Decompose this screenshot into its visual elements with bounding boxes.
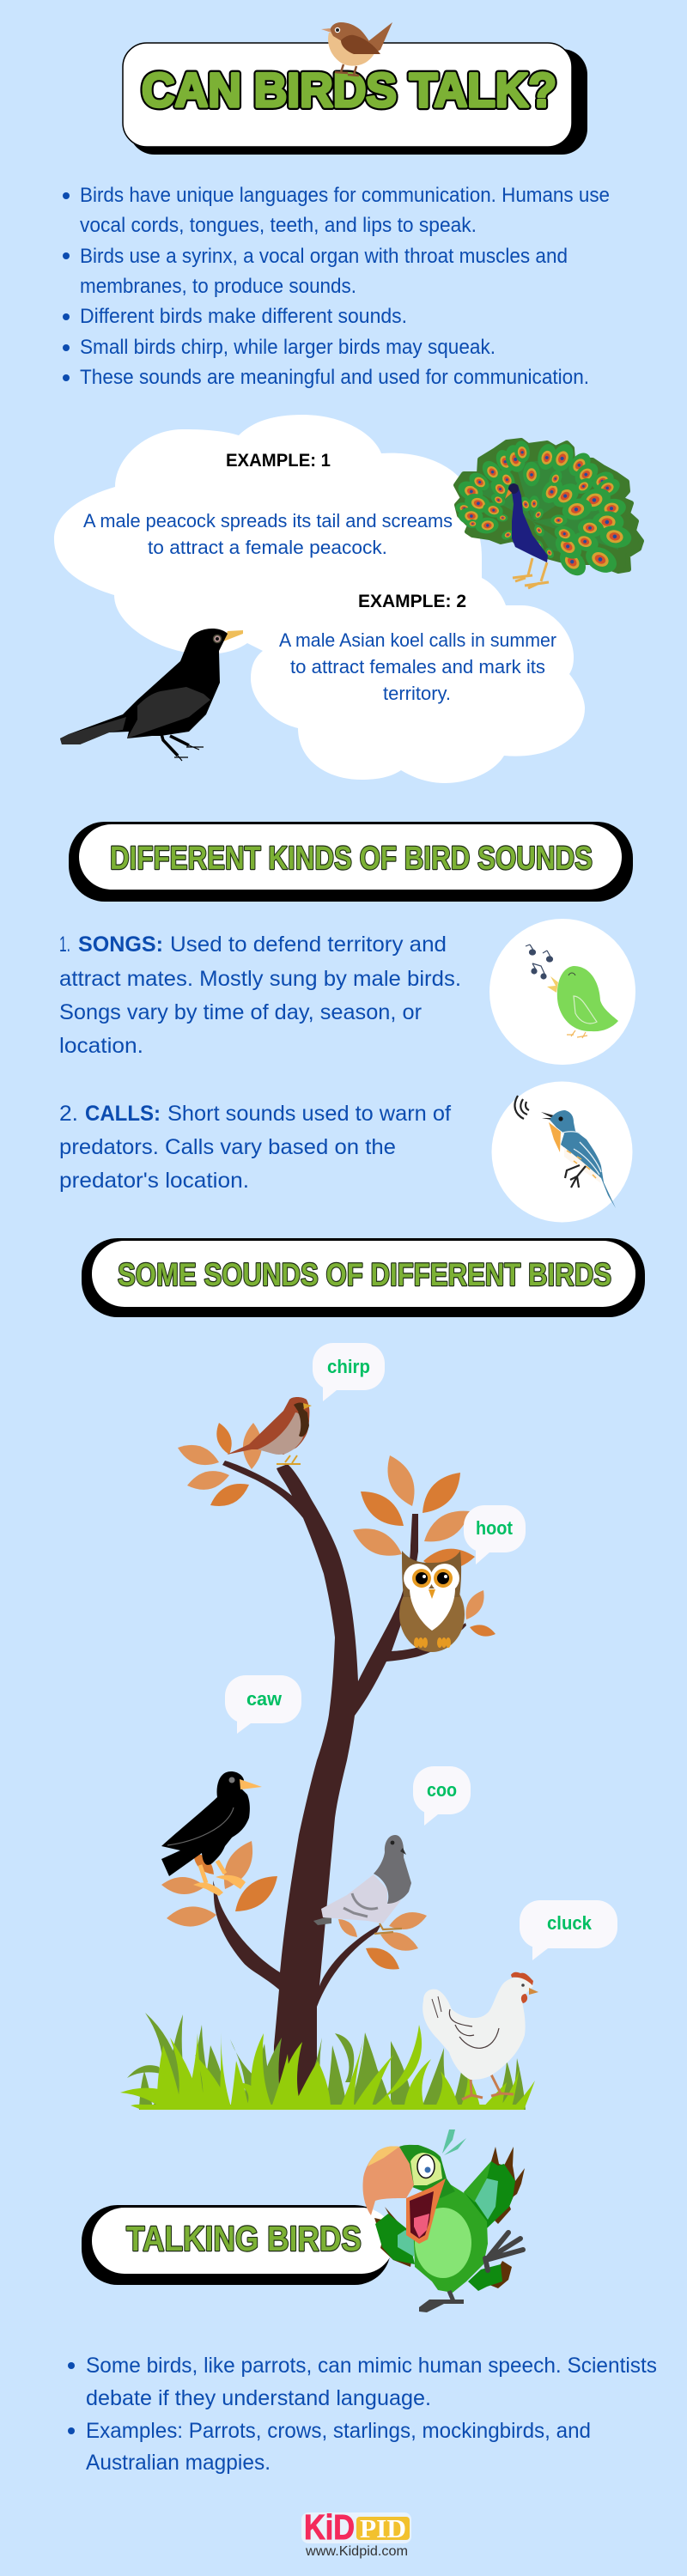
- bullet list: talking birds facts: [68, 2354, 657, 2475]
- example 2 text: territory.: [383, 683, 451, 704]
- bullet list: intro facts: Small birds chirp, while larger birds may squeak.: [80, 336, 495, 359]
- bullet list: talking birds facts: Australian magpies.: [86, 2451, 271, 2475]
- callout: chirp: chirp: [327, 1356, 370, 1377]
- callout: coo: coo: [427, 1779, 457, 1801]
- bullet list: intro facts: vocal cords, tongues, teeth, and lips to speak.: [80, 214, 477, 237]
- icon: sparrow: [227, 1397, 312, 1464]
- icon: parrot: [362, 2129, 525, 2312]
- example 2 text: A male Asian koel calls in summer: [279, 629, 556, 651]
- example 1 text: [83, 451, 453, 558]
- callout: caw: caw: [246, 1688, 283, 1710]
- text block: songs: Used to defend territory and: [170, 933, 447, 957]
- text block: songs: attract mates. Mostly sung by male birds.: [59, 967, 461, 991]
- bullet list: intro facts: Birds have unique languages for communication. Humans use: [80, 184, 610, 207]
- website url: www.Kidpid.com: [305, 2544, 408, 2559]
- callout: coo: [413, 1766, 471, 1826]
- example 1 text: A male peacock spreads its tail and screams: [83, 510, 453, 532]
- text block: calls: predator's location.: [59, 1169, 249, 1193]
- icon: wren on title: [321, 22, 392, 76]
- icon: calling blue bird: [491, 1082, 632, 1223]
- text block: calls: [59, 1102, 451, 1193]
- text block: songs: 1.: [59, 933, 70, 957]
- title banner: CAN BIRDS TALK?: [142, 63, 556, 117]
- text block: calls: CALLS:: [85, 1102, 161, 1126]
- logo: Kidpid: [301, 2507, 411, 2559]
- example 2 text: EXAMPLE: 2: [358, 592, 466, 611]
- example 2 text: [279, 592, 556, 704]
- callout: hoot: [464, 1505, 526, 1564]
- text block: songs: location.: [59, 1034, 143, 1058]
- bullet list: intro facts: Birds use a syrinx, a vocal organ with throat muscles and: [80, 245, 568, 268]
- sound waves: [514, 1096, 529, 1119]
- callout: chirp: [313, 1343, 385, 1401]
- callout: caw: [225, 1675, 301, 1734]
- title text: CAN BIRDS TALK?: [142, 63, 556, 117]
- text block: songs: SONGS:: [78, 933, 163, 957]
- text block: songs: Songs vary by time of day, season, or: [59, 1000, 422, 1024]
- music notes: [526, 945, 553, 979]
- bullet list: intro facts: Different birds make different sounds.: [80, 305, 407, 328]
- bullet list: talking birds facts: debate if they understand language.: [86, 2386, 431, 2410]
- leaves: [161, 1423, 495, 1970]
- heading: different kinds of bird sounds: [69, 822, 633, 902]
- icon: owl: [399, 1551, 465, 1652]
- cloud panel: examples: [54, 415, 585, 783]
- icon: singing green bird: [489, 919, 635, 1065]
- tree: [213, 1461, 466, 2101]
- icon: hen: [423, 1972, 538, 2099]
- heading: talking birds: [82, 2205, 394, 2285]
- icon: pigeon: [313, 1835, 411, 1934]
- example 1 text: to attract a female peacock.: [148, 537, 387, 558]
- bullet list: talking birds facts: Examples: Parrots, crows, starlings, mockingbirds, and: [86, 2419, 591, 2443]
- text block: calls: 2.: [59, 1102, 78, 1126]
- bullet list: intro facts: These sounds are meaningful and used for communication.: [80, 366, 589, 389]
- bullet list: talking birds facts: Some birds, like parrots, can mimic human speech. Scientists: [86, 2354, 657, 2378]
- heading: different kinds of bird sounds: DIFFERENT KINDS OF BIRD SOUNDS: [110, 841, 593, 877]
- heading: some sounds of different birds: [82, 1238, 645, 1317]
- logo: Kidpid: PID: [360, 2513, 406, 2543]
- title banner: [123, 43, 587, 155]
- example 2 text: to attract females and mark its: [290, 656, 545, 677]
- icon: peacock: [454, 440, 641, 588]
- bullet list: intro facts: membranes, to produce sounds.: [80, 275, 356, 298]
- example 1 text: EXAMPLE: 1: [226, 451, 331, 471]
- icon: crow: [161, 1771, 262, 1896]
- text block: songs: [59, 933, 461, 1058]
- heading: some sounds of different birds: SOME SOUNDS OF DIFFERENT BIRDS: [118, 1257, 611, 1292]
- grass: [120, 2013, 535, 2110]
- icon: blackbird: [60, 629, 243, 761]
- text block: calls: predators. Calls vary based on the: [59, 1135, 396, 1159]
- text block: calls: Short sounds used to warn of: [167, 1102, 451, 1126]
- callout: hoot: hoot: [476, 1517, 514, 1539]
- heading: talking birds: TALKING BIRDS: [126, 2219, 362, 2258]
- callout: cluck: cluck: [547, 1912, 593, 1934]
- logo: Kidpid: KiD: [304, 2507, 355, 2547]
- callout: cluck: [520, 1900, 617, 1960]
- bullet list: intro facts: [63, 184, 610, 389]
